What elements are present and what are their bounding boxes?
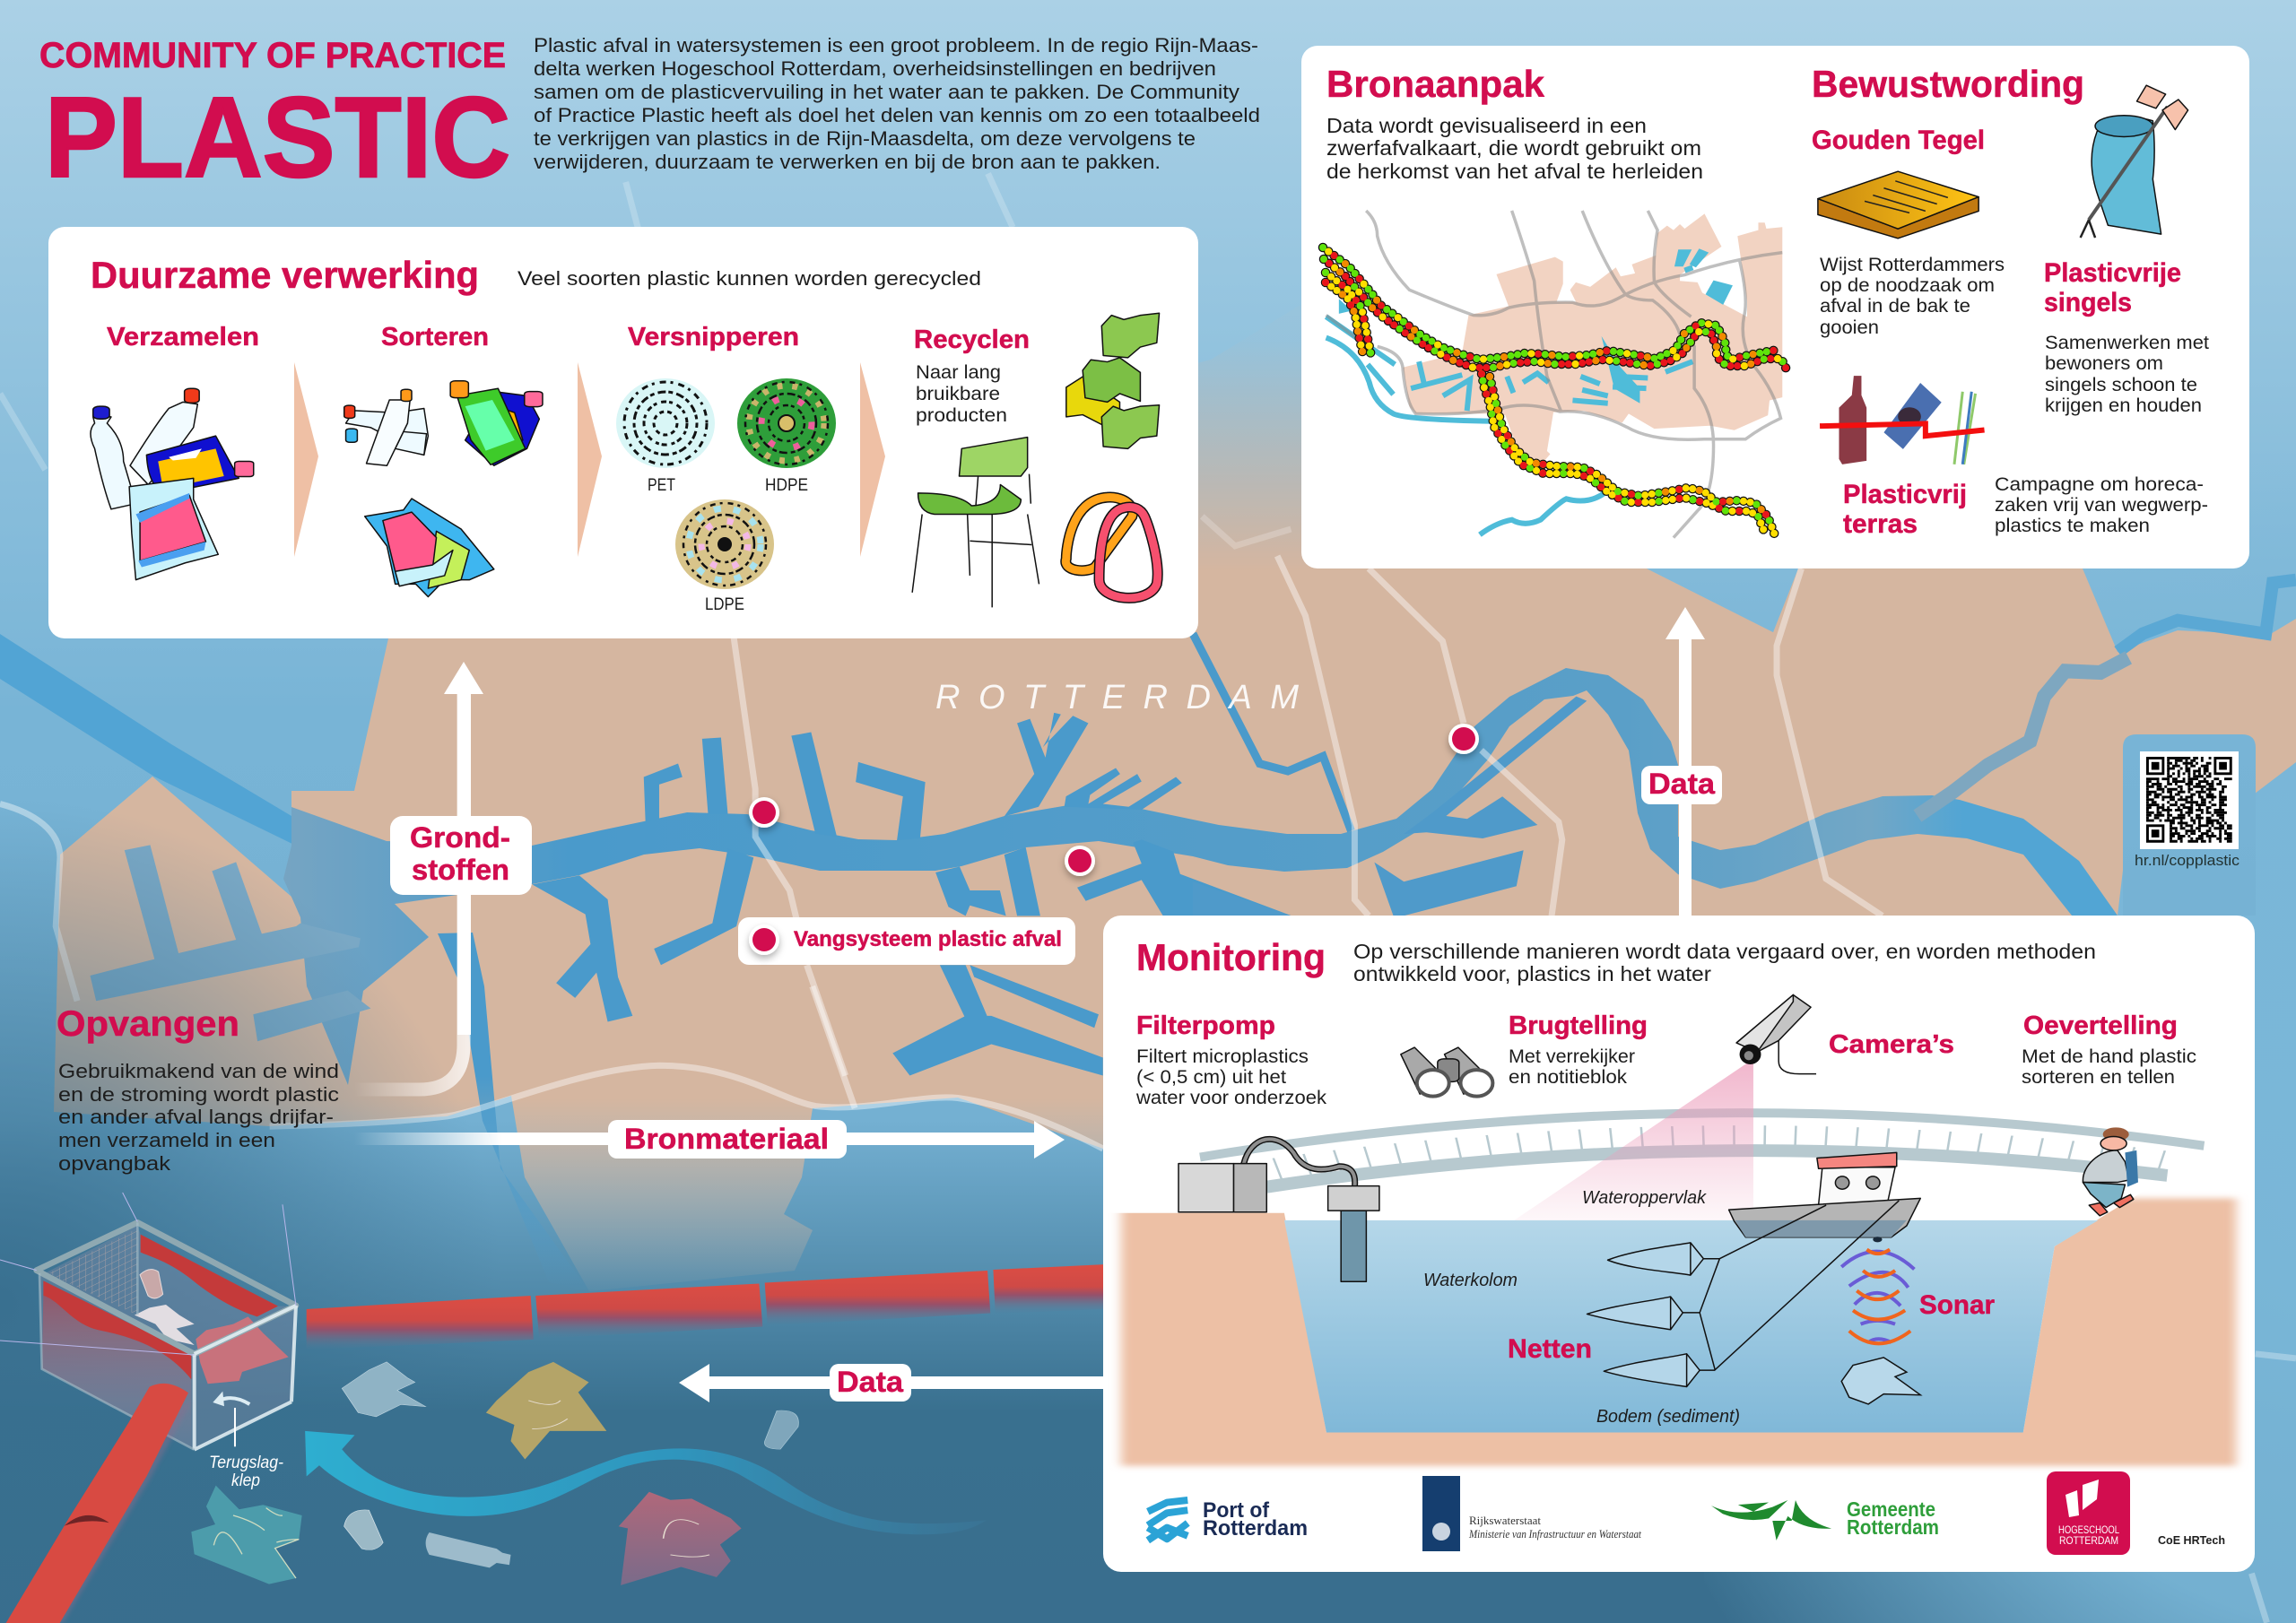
valve arrowhead <box>213 1392 224 1406</box>
QR caption: hr.nl/copplastic <box>2135 852 2240 869</box>
sonar <box>1841 1237 1920 1404</box>
red cross line <box>1820 423 1985 436</box>
subtitle: Veel soorten plastic kunnen worden gerecycled <box>517 267 981 290</box>
heading: Monitoring: Monitoring <box>1136 936 1326 978</box>
icon group: sorted bottles <box>344 389 428 465</box>
text: Filterpomp: (< 0,5 cm) uit het <box>1136 1067 1286 1088</box>
text: Plasticvrij terras: zaken vrij van wegwerp- <box>1995 495 2208 516</box>
body text: Opvangen: men verzameld in een <box>58 1129 275 1151</box>
icon group: sorted jugs <box>450 381 543 465</box>
text: Bronaanpak: de herkomst van het afval te herleiden <box>1326 160 1703 183</box>
body text: Opvangen: opvangbak <box>58 1152 171 1175</box>
text: Plasticvrije singels <box>2045 333 2209 416</box>
arrow: Bronmateriaal <box>354 1121 1065 1159</box>
icon: litter bag and grabber <box>2081 85 2188 238</box>
cup left <box>344 1510 383 1549</box>
body text: Opvangen: Gebruikmakend van de wind <box>58 1060 339 1082</box>
text: Gouden Tegel: afval in de bak te <box>1820 296 1970 317</box>
intro text <box>534 34 1260 173</box>
label: non-return valve: klep <box>231 1471 260 1490</box>
step heading: Sorteren: Sorteren <box>381 323 489 352</box>
scene: swoosh current arrow <box>305 1431 986 1534</box>
logo: Rijkswaterstaat: Ministerie van Infrastructuur en Waterstaat <box>1468 1527 1641 1541</box>
text: Bronaanpak: Data wordt gevisualiseerd in een <box>1326 114 1647 137</box>
label: CoE HRTech: CoE HRTech <box>2158 1533 2225 1547</box>
panel: QR code <box>2123 734 2256 916</box>
bag pink <box>140 495 206 560</box>
text: Oevertelling: sorteren en tellen <box>2022 1067 2175 1088</box>
bridge balusters <box>1248 1139 2183 1176</box>
panel: Monitoring <box>1103 916 2255 1572</box>
text: Oevertelling: Met de hand plastic <box>2022 1046 2196 1067</box>
river: thin tributary east <box>2118 580 2296 652</box>
QR finder patterns <box>2146 757 2232 843</box>
icon: PET flakes <box>616 378 715 468</box>
land <box>1403 213 1782 462</box>
bottle <box>1839 376 1866 464</box>
map: land <box>54 305 2296 1291</box>
filter pump unit <box>1178 1139 1379 1281</box>
text: Plasticvrije singels: Samenwerken met <box>2045 333 2209 353</box>
icon: HDPE flakes <box>737 378 836 468</box>
text: Gouden Tegel: gooien <box>1820 317 1879 338</box>
logo: Hogeschool Rotterdam <box>2047 1471 2130 1555</box>
bottle cap blue <box>93 406 109 419</box>
yellow plastic <box>486 1362 606 1460</box>
text: Gouden Tegel: Wijst Rotterdammers <box>1820 255 2005 275</box>
river: Nieuwe Maas main channel <box>283 668 2118 1085</box>
step heading: Verzamelen: Verzamelen <box>107 323 259 352</box>
icon group: sorted bags <box>365 499 494 597</box>
red plastic <box>619 1492 742 1585</box>
jug cap <box>235 461 254 476</box>
text: Filterpomp <box>1135 1046 1327 1108</box>
basket far edges <box>39 1222 195 1450</box>
body text: Opvangen <box>58 1060 339 1175</box>
logo: Rijkswaterstaat <box>1422 1476 1641 1551</box>
basket front edges <box>195 1306 296 1450</box>
map: rivers <box>0 580 2296 1291</box>
logo: Port of Rotterdam <box>1148 1498 1308 1541</box>
text: Monitoring intro <box>1353 940 2096 985</box>
label: Wateroppervlak: Wateroppervlak <box>1582 1188 1707 1208</box>
tube shadow <box>33 1402 191 1623</box>
map: litter map base <box>1326 211 1782 538</box>
text block: Opvangen <box>57 1004 339 1175</box>
text: Brugtelling <box>1509 1046 1635 1088</box>
river: harbour basins <box>90 713 1292 1076</box>
scene: teal plastic <box>191 1486 302 1584</box>
basket interior <box>39 1226 296 1450</box>
text: Oevertelling <box>2022 1046 2196 1088</box>
step heading: Versnipperen: Versnipperen <box>628 323 799 352</box>
legend: Vangsysteem plastic afval <box>738 917 1075 965</box>
river: south strip <box>438 933 589 1291</box>
intro text: verwijderen, duurzaam te verwerken en bij de bron aan te pakken. <box>534 151 1161 173</box>
heading: Plasticvrij terras <box>1843 480 1967 539</box>
chevron 1 <box>294 362 318 557</box>
label: Grondstoffen: stoffen <box>412 854 509 886</box>
red plastic in basket <box>196 1316 289 1384</box>
body text: Opvangen: en de stroming wordt plastic <box>58 1083 339 1106</box>
bottle white <box>91 417 135 509</box>
text: Monitoring intro: ontwikkeld voor, plastics in het water <box>1353 962 1711 985</box>
jug <box>146 436 239 493</box>
heading: Gouden Tegel: Gouden Tegel <box>1812 126 1985 155</box>
heading: Plasticvrije singels <box>2044 258 2181 317</box>
grey plastic <box>342 1362 426 1417</box>
text: Naar lang bruikbare producten: Naar lang <box>916 362 1001 383</box>
logo: Gemeente Rotterdam <box>1711 1497 1939 1541</box>
chevron 2 <box>578 362 602 557</box>
heading: Duurzame verwerking: Duurzame verwerking <box>91 254 479 296</box>
step heading: Recyclen: Recyclen <box>914 325 1030 354</box>
heading: Filterpomp: Filterpomp <box>1136 1011 1275 1040</box>
text: Naar lang bruikbare producten: bruikbare <box>916 384 1000 404</box>
tube joint <box>65 1515 109 1526</box>
basket red front skirt <box>43 1280 191 1379</box>
bottle cap red <box>185 388 199 403</box>
text: Monitoring intro: Op verschillende manieren wordt data vergaard over, en worden methoden <box>1353 940 2096 963</box>
camera cone <box>1514 1059 1753 1220</box>
text: Plasticvrij terras: Campagne om horeca- <box>1995 474 2204 495</box>
icon: LDPE flakes <box>675 499 774 589</box>
person sorting on the bank <box>2083 1127 2138 1216</box>
heading: Oevertelling: Oevertelling <box>2023 1011 2178 1040</box>
arrow: Data upward <box>1665 607 1705 924</box>
cup right <box>764 1410 798 1449</box>
panel: Bronaanpak and Bewustwording <box>1301 46 2249 568</box>
marker: catch system 2 <box>1065 846 1095 876</box>
basket red back skirt <box>141 1235 278 1316</box>
bridge deck <box>1266 1150 2167 1187</box>
nets <box>1587 1201 1899 1387</box>
QR modules <box>2146 758 2232 841</box>
intro text: of Practice Plastic heeft als doel het delen van kennis om zo een totaalbeeld <box>534 104 1260 126</box>
label: non-return valve: Terugslag- <box>209 1454 283 1472</box>
label: Waterkolom: Waterkolom <box>1423 1271 1518 1290</box>
label: PET: PET <box>648 476 675 495</box>
heading: Camera's: Camera’s <box>1829 1030 1954 1059</box>
heading: Opvangen: Opvangen <box>57 1004 239 1044</box>
diagram: river cross-section <box>1121 1059 2236 1466</box>
text: Bronaanpak: zwerfafvalkaart, die wordt gebruikt om <box>1326 136 1701 160</box>
bag <box>129 478 218 580</box>
icon: chair <box>912 438 1039 607</box>
text: Plasticvrije singels: krijgen en houden <box>2045 395 2202 416</box>
valve pointer line <box>232 1408 238 1446</box>
jug handle <box>169 448 202 461</box>
label: Grondstoffen <box>390 816 532 895</box>
map: litter survey dots <box>1323 247 1787 535</box>
label: Data left: Data <box>837 1366 903 1398</box>
river: grey tributary east <box>1918 657 2128 816</box>
logo: Rijkswaterstaat: Rijkswaterstaat <box>1469 1514 1541 1527</box>
label: Data upward: Data <box>1648 768 1715 800</box>
bottle <box>426 1532 511 1567</box>
background: lighter water on the right <box>1704 448 2296 1623</box>
grey roads <box>1326 211 1782 538</box>
title: Plastic: PLASTIC <box>45 74 510 201</box>
marker: catch system 3 <box>1448 724 1479 754</box>
text: Gouden Tegel: op de noodzaak om <box>1820 275 1995 296</box>
curls <box>528 1401 709 1557</box>
background: dark water overlay at bottom left <box>0 789 556 1623</box>
bridge top rail <box>1200 1113 2204 1157</box>
logo: Port of Rotterdam: Port of <box>1203 1498 1270 1523</box>
snack bag <box>1883 383 1942 449</box>
icon: crossed out disposable items <box>1820 376 1985 464</box>
intro text: te verkrijgen van plastics in de Rijn-Maasdelta, om deze vervolgens te <box>534 127 1196 150</box>
river: north-west waterway <box>0 634 296 846</box>
river: harbour in the east <box>1193 697 1587 916</box>
logo: Gemeente Rotterdam: Gemeente <box>1847 1497 1935 1521</box>
label: Bronmateriaal: Bronmateriaal <box>624 1123 829 1155</box>
water <box>1284 1220 2099 1433</box>
heading: Plasticvrije singels: Plasticvrije <box>2044 258 2181 288</box>
jug label <box>158 448 224 489</box>
label: Bronmateriaal <box>608 1120 847 1159</box>
icon group: recycled bricks <box>1066 313 1160 448</box>
label: Sonar: Sonar <box>1919 1290 1995 1320</box>
arrow: Data to the left <box>679 1364 1112 1402</box>
arrow: Grondstoffen upward <box>354 662 483 1089</box>
label: LDPE: LDPE <box>705 595 744 614</box>
heading: Plasticvrij terras: Plasticvrij <box>1843 480 1967 509</box>
icon: surveillance camera <box>1736 994 1816 1074</box>
body text: Opvangen: en ander afval langs drijfar- <box>58 1106 334 1128</box>
scene: floating boom <box>307 1264 1104 1350</box>
curls on teal plastic <box>213 1508 299 1578</box>
title: Community of Practice: COMMUNITY OF PRACTICE <box>39 36 506 75</box>
logo: Hogeschool Rotterdam: ROTTERDAM <box>2059 1534 2118 1547</box>
heading: Bronaanpak: Bronaanpak <box>1326 63 1545 105</box>
bottle second <box>130 402 197 484</box>
icon: binoculars <box>1401 1047 1492 1097</box>
scene: floating plastics <box>342 1362 798 1585</box>
red tube <box>6 1384 188 1623</box>
text: Gouden Tegel <box>1820 255 2005 338</box>
icon: golden tile <box>1818 171 1979 239</box>
text: Brugtelling: Met verrekijker <box>1509 1046 1635 1067</box>
river: thin canal north <box>1193 634 1351 831</box>
scene: catch basket and tube <box>0 1193 296 1623</box>
boat <box>1729 1152 1920 1237</box>
marker: catch system 1 <box>749 797 779 828</box>
label: Rotterdam: ROTTERDAM <box>935 679 1299 716</box>
text: Plasticvrije singels: bewoners om <box>2045 353 2163 374</box>
chevron 3 <box>860 362 885 557</box>
bag stripe <box>138 542 206 567</box>
text: Naar lang bruikbare producten: producten <box>916 405 1007 426</box>
heading: Plasticvrije singels: singels <box>2044 288 2132 317</box>
straws <box>1954 392 1976 464</box>
icon: carabiners <box>1065 497 1158 598</box>
text: Bronaanpak <box>1326 114 1703 183</box>
text: Plasticvrije singels: singels schoon te <box>2045 375 2197 395</box>
water bodies <box>1339 248 1733 404</box>
river banks <box>1121 1198 2236 1466</box>
non-return valve arrow <box>220 1398 249 1404</box>
logo: Port of Rotterdam: Rotterdam <box>1203 1516 1308 1541</box>
text: Filterpomp: Filtert microplastics <box>1136 1046 1309 1067</box>
text: Brugtelling: en notitieblok <box>1509 1067 1628 1088</box>
panel: Duurzame verwerking <box>48 227 1198 638</box>
heading: Bewustwording: Bewustwording <box>1812 63 2084 105</box>
label: non-return valve <box>209 1454 283 1490</box>
water lines <box>1326 267 1692 534</box>
label: Bodem: Bodem (sediment) <box>1596 1407 1740 1427</box>
text: Plasticvrij terras <box>1995 474 2208 536</box>
label: Data left <box>830 1364 911 1402</box>
logo: Hogeschool Rotterdam: HOGESCHOOL <box>2058 1523 2119 1536</box>
icon group: collected plastics <box>91 388 254 580</box>
mooring lines <box>0 1193 296 1355</box>
label: Data upward <box>1641 766 1722 804</box>
label: HDPE: HDPE <box>765 476 808 495</box>
basket mesh <box>49 1228 137 1315</box>
basket frame <box>37 1222 296 1354</box>
label: Netten: Netten <box>1508 1334 1592 1364</box>
logo: Gemeente Rotterdam: Rotterdam <box>1847 1515 1939 1539</box>
legend: Vangsysteem plastic afval: Vangsysteem plastic afval <box>794 927 1062 951</box>
white plastic in basket <box>135 1305 195 1345</box>
title block <box>39 36 510 201</box>
basket lower side <box>42 1296 191 1450</box>
intro text: samen om de plasticvervuiling in het water aan te pakken. De Community <box>534 81 1239 103</box>
text: Filterpomp: water voor onderzoek <box>1135 1088 1327 1108</box>
label: Grondstoffen: Grond- <box>410 821 510 854</box>
text: Plasticvrij terras: plastics te maken <box>1995 516 2150 536</box>
intro text: Plastic afval in watersystemen is een groot probleem. In de regio Rijn-Maas- <box>534 34 1258 56</box>
heading: Plasticvrij terras: terras <box>1843 509 1918 539</box>
map: sea wedge below Bronaanpak panel <box>1641 556 1798 632</box>
cup in basket <box>140 1270 163 1298</box>
intro text: delta werken Hogeschool Rotterdam, overheidsinstellingen en bedrijven <box>534 57 1216 80</box>
heading: Brugtelling: Brugtelling <box>1509 1011 1648 1040</box>
text: Naar lang bruikbare producten <box>916 362 1007 426</box>
